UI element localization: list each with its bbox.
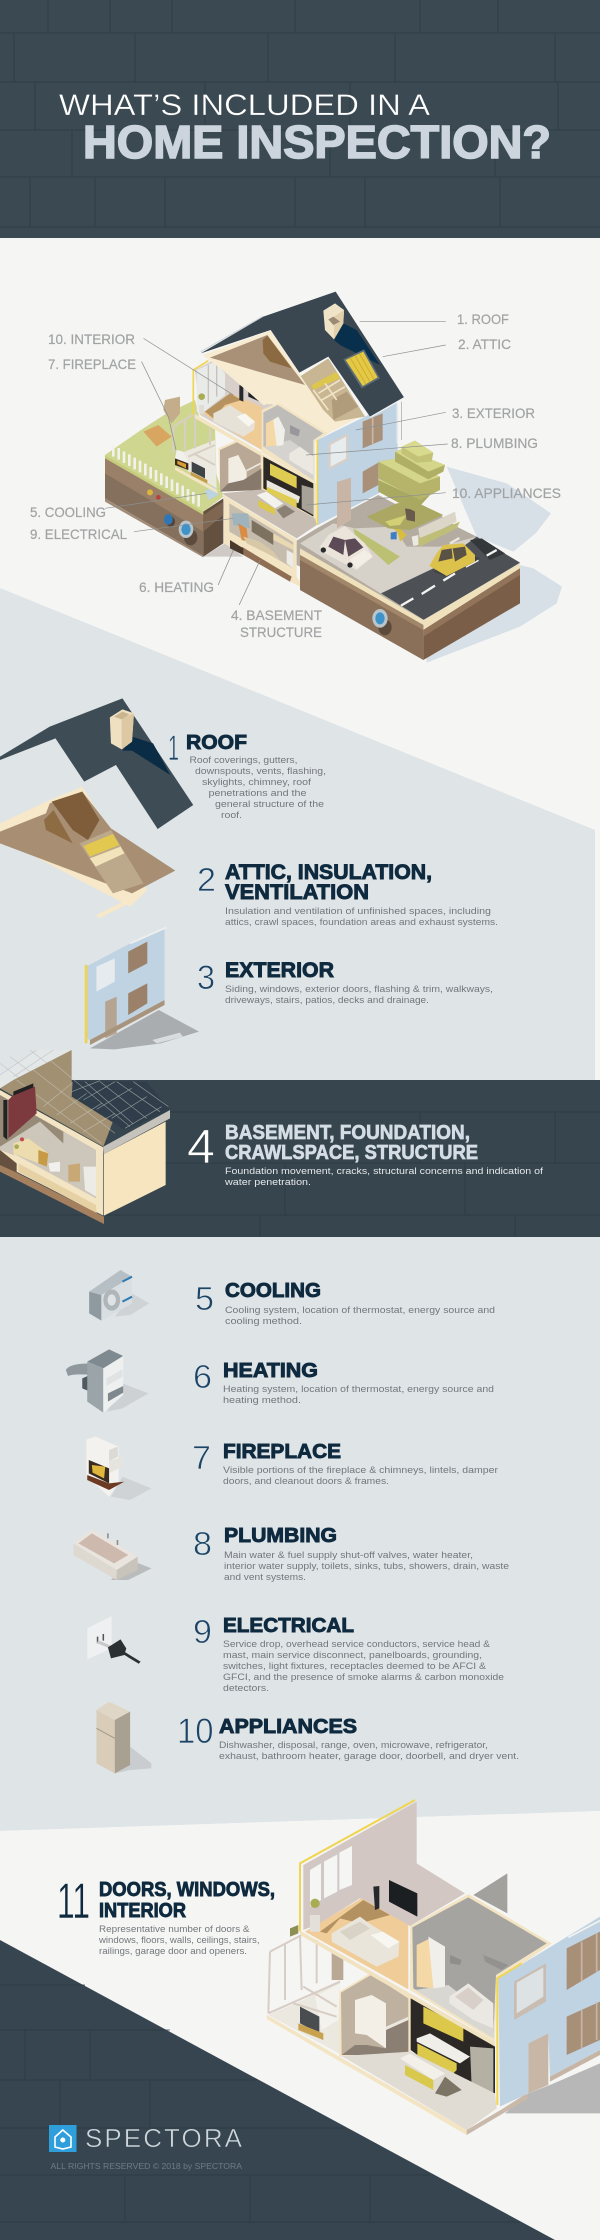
floor slabs xyxy=(267,2015,467,2135)
section 11: doors, windows, interior: 11 xyxy=(57,1873,90,1929)
section 3: exterior: 3 xyxy=(197,959,215,997)
illustration: roof and attic crop xyxy=(0,698,199,1049)
section 5: cooling: Cooling system, location of thermostat, energy source and xyxy=(225,1305,495,1316)
driveway block and cars xyxy=(273,467,562,663)
section 2: attic xyxy=(197,861,498,928)
section 9: electrical: detectors. xyxy=(223,1683,269,1694)
tree xyxy=(367,441,445,530)
house callout labels: 6. HEATING xyxy=(139,579,214,595)
icon: furnace xyxy=(66,1349,148,1413)
icon: roof xyxy=(0,698,193,829)
icon: attic xyxy=(0,787,175,917)
basement xyxy=(222,494,300,587)
kitchen xyxy=(342,1997,497,2130)
attic gable and insulation xyxy=(203,331,365,433)
icon: air conditioner xyxy=(89,1270,149,1321)
section 2: attic: attics, crawl spaces, foundation areas and exhaust systems. xyxy=(225,917,498,928)
title: HOME INSPECTION? xyxy=(83,116,551,168)
section 9: electrical xyxy=(193,1613,504,1694)
section 4: basement: water penetration. xyxy=(224,1177,311,1188)
section 5: cooling xyxy=(195,1280,495,1327)
section 1: roof: roof. xyxy=(221,810,242,821)
yellow car xyxy=(429,538,480,577)
panel: grey diagonal backdrop for sections 1-3 xyxy=(0,588,595,1080)
copyright: ALL RIGHTS RESERVED © 2018 by SPECTORA xyxy=(50,2161,242,2171)
section 8: plumbing: Main water & fuel supply shut-off valves, water heater, xyxy=(224,1550,473,1561)
icon: fireplace xyxy=(86,1437,152,1500)
section 8: plumbing: 8 xyxy=(193,1525,212,1562)
upper house, attic and roof xyxy=(193,292,405,528)
garden block and basement xyxy=(105,397,317,587)
upper bathroom xyxy=(262,403,328,483)
section 8: plumbing xyxy=(193,1525,509,1583)
section 6: heating: HEATING xyxy=(223,1360,318,1382)
section 7: fireplace xyxy=(192,1439,499,1487)
section 1: roof: penetrations and the xyxy=(208,788,306,799)
section 10: appliances: APPLIANCES xyxy=(219,1716,357,1738)
house callout labels: 2. ATTIC xyxy=(458,336,511,352)
section 10: appliances: exhaust, bathroom heater, garage door, doorbell, and dryer vent. xyxy=(219,1751,519,1762)
icons: electrical, appliances xyxy=(87,1616,152,1773)
section 3: exterior: EXTERIOR xyxy=(225,959,334,982)
house callout labels: 9. ELECTRICAL xyxy=(30,526,127,542)
section 8: plumbing: and vent systems. xyxy=(224,1572,306,1583)
section 4: basement: BASEMENT, FOUNDATION, xyxy=(225,1122,470,1144)
house callout labels: 3. EXTERIOR xyxy=(452,405,535,421)
panel: dark brick footer wedge xyxy=(0,1940,555,2240)
section 4: basement: CRAWLSPACE, STRUCTURE xyxy=(225,1142,478,1164)
section 9: electrical: switches, light fixtures, receptacles deemed to be AFCI & xyxy=(223,1661,487,1672)
icon: exterior wall xyxy=(86,927,199,1049)
section 11: doors, windows, interior: railings, garage door and openers. xyxy=(99,1946,247,1957)
section 7: fireplace: FIREPLACE xyxy=(223,1441,341,1463)
section 9: electrical: GFCI, and the presence of smoke alarms & carbon monoxide xyxy=(223,1672,504,1683)
section 3: exterior: Siding, windows, exterior doors, flashing & trim, walkways, xyxy=(225,984,493,995)
section 4: basement: Foundation movement, cracks, structural concerns and indication of xyxy=(225,1166,543,1177)
panel: header band xyxy=(0,0,600,238)
section 10: appliances xyxy=(177,1712,519,1762)
section 9: electrical: 9 xyxy=(193,1613,212,1650)
section 4: basement: 4 xyxy=(187,1121,215,1174)
section 3: exterior: driveways, stairs, patios, decks and drainage. xyxy=(225,995,429,1006)
house callout labels: STRUCTURE xyxy=(240,624,322,640)
section 5: cooling: cooling method. xyxy=(225,1316,302,1327)
panel: grey backdrop for sections 5-10 xyxy=(0,1237,600,1831)
title: WHAT’S INCLUDED IN A xyxy=(59,89,430,122)
section 6: heating: Heating system, location of thermostat, energy source and xyxy=(223,1384,494,1395)
section 7: fireplace: Visible portions of the fireplace & chimneys, lintels, damper xyxy=(223,1465,499,1476)
section 2: attic: ATTIC, INSULATION, xyxy=(225,861,432,884)
icons: cooling, heating, fireplace, plumbing xyxy=(66,1270,152,1580)
house callout labels: 5. COOLING xyxy=(30,504,106,520)
illustration: basement crop xyxy=(0,1050,170,1224)
section 10: appliances: 10 xyxy=(177,1712,214,1751)
kitchen xyxy=(222,453,317,538)
leader lines xyxy=(105,322,448,605)
section 11: doors, windows, interior: DOORS, WINDOWS, xyxy=(99,1879,275,1901)
house callout labels: 4. BASEMENT xyxy=(231,607,322,623)
icon: plug and outlet xyxy=(87,1616,140,1663)
illustration: interior cutaway xyxy=(267,1800,600,2135)
section 11: doors, windows, interior: INTERIOR xyxy=(99,1900,187,1922)
section 2: attic: 2 xyxy=(197,861,216,898)
section 5: cooling: COOLING xyxy=(225,1280,321,1302)
section 11: doors, windows, interior: windows, floors, walls, ceilings, stairs, xyxy=(98,1935,259,1946)
section 1: roof xyxy=(168,729,326,821)
icon: refrigerator xyxy=(96,1702,152,1773)
section 4: basement xyxy=(187,1121,543,1188)
panel: white diagonal footer field xyxy=(0,1811,600,2240)
section 11: doors, windows, interior: Representative number of doors & xyxy=(99,1924,250,1935)
lower living room xyxy=(268,1935,343,2054)
upper living room xyxy=(193,358,273,456)
lower living room xyxy=(173,413,217,493)
section 10: appliances: Dishwasher, disposal, range, oven, microwave, refrigerator, xyxy=(219,1740,488,1751)
house callout labels: 8. PLUMBING xyxy=(451,435,538,451)
section 8: plumbing: interior water supply, toilets, sinks, tubs, showers, drain, waste xyxy=(224,1561,509,1572)
section 9: electrical: mast, main service disconnect, panelboards, grounding, xyxy=(223,1650,482,1661)
white car xyxy=(320,526,373,570)
section 8: plumbing: PLUMBING xyxy=(224,1525,337,1547)
section 1: roof: skylights, chimney, roof xyxy=(202,777,311,788)
section 7: fireplace: 7 xyxy=(192,1439,211,1476)
section 9: electrical: ELECTRICAL xyxy=(223,1615,354,1637)
section 11: doors, windows, interior xyxy=(57,1873,275,1957)
logo: Spectora: SPECTORA xyxy=(85,2123,243,2153)
bathroom xyxy=(410,1894,552,2042)
section 2: attic: Insulation and ventilation of unfinished spaces, including xyxy=(225,906,491,917)
upper living room xyxy=(290,1800,465,1989)
house callout labels: 1. ROOF xyxy=(457,311,509,327)
hall room xyxy=(218,439,262,492)
section 1: roof: ROOF xyxy=(186,732,247,754)
section 6: heating: 6 xyxy=(193,1358,212,1395)
section 1: roof: downspouts, vents, flashing, xyxy=(195,766,326,777)
section 2: attic: VENTILATION xyxy=(225,881,369,904)
panel: basement band xyxy=(0,1080,600,1237)
house callout labels: 7. FIREPLACE xyxy=(48,356,136,372)
house callout labels xyxy=(30,311,561,640)
illustration: cutaway house xyxy=(105,292,562,663)
house callout labels: 10. INTERIOR xyxy=(48,331,135,347)
section 9: electrical: Service drop, overhead service conductors, service head & xyxy=(223,1639,491,1650)
section 3: exterior xyxy=(197,959,493,1006)
blue exterior wall xyxy=(317,402,401,528)
section 7: fireplace: doors, and cleanout doors & frames. xyxy=(223,1476,389,1487)
title xyxy=(59,89,551,168)
hall room xyxy=(339,1972,411,2057)
section 1: roof: general structure of the xyxy=(215,799,324,810)
section 5: cooling: 5 xyxy=(195,1280,214,1317)
icon: bathtub xyxy=(73,1529,152,1580)
section 6: heating xyxy=(193,1358,494,1406)
roof xyxy=(201,292,405,417)
section 1: roof: Roof coverings, gutters, xyxy=(190,755,298,766)
blue exterior wall xyxy=(497,1917,600,2107)
section 6: heating: heating method. xyxy=(223,1395,301,1406)
section 1: roof: 1 xyxy=(168,729,179,768)
house callout labels: 10. APPLIANCES xyxy=(452,485,561,501)
